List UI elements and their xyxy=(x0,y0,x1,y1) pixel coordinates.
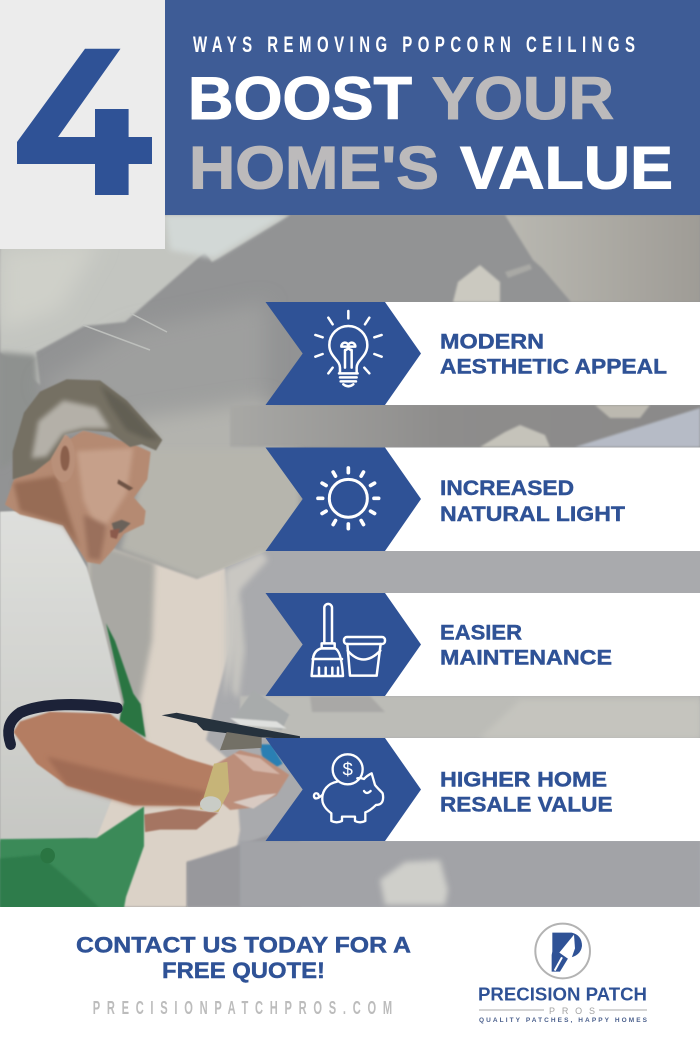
ear xyxy=(55,434,74,481)
label: HIGHER HOME xyxy=(440,769,607,792)
background photo: plasterer working on ceiling xyxy=(0,215,700,908)
big numeral 4 xyxy=(17,49,152,195)
label: INCREASED xyxy=(440,477,574,500)
call to action xyxy=(76,933,411,983)
icon: light bulb xyxy=(315,311,382,386)
title line one: YOUR xyxy=(432,65,614,132)
title line two: VALUE xyxy=(460,134,673,202)
label: EASIER xyxy=(440,621,522,644)
hair xyxy=(13,379,162,479)
title line two: HOME'S xyxy=(189,134,439,202)
label: MAINTENANCE xyxy=(440,646,612,670)
label: MODERN xyxy=(440,330,544,353)
website: PRECISIONPATCHPROS.COM xyxy=(93,998,392,1019)
label xyxy=(440,477,625,526)
blue trowel handle xyxy=(260,744,283,769)
logo tagline: QUALITY PATCHES, HAPPY HOMES xyxy=(479,1017,648,1024)
sleeve band xyxy=(8,705,117,744)
logo name: PRECISION PATCH xyxy=(478,984,647,1005)
panel: number 4 xyxy=(0,0,165,249)
icon: piggy bank with coin xyxy=(314,754,383,822)
icon: piggy bank with coin: $ xyxy=(342,759,353,780)
label xyxy=(440,769,612,817)
lower hand xyxy=(144,809,218,832)
spatula and plaster xyxy=(230,696,289,730)
panel: easier maintenance xyxy=(266,593,700,696)
moustache and eye xyxy=(110,479,133,539)
wrist watch xyxy=(200,762,229,812)
upper hand xyxy=(213,750,289,810)
neck and face xyxy=(5,430,151,564)
title line one: BOOST xyxy=(188,65,412,132)
plasterer figure xyxy=(0,379,300,908)
label xyxy=(440,330,667,378)
subtitle: WAYS REMOVING POPCORN CEILINGS xyxy=(193,32,635,57)
title line one xyxy=(188,65,614,132)
wall below ceiling line xyxy=(187,551,700,907)
icon: broom and bucket xyxy=(312,604,385,676)
logo xyxy=(478,924,648,1024)
label xyxy=(440,621,612,670)
green overalls xyxy=(0,806,144,908)
panel: higher home resale value xyxy=(266,738,700,841)
logo sub-name: PROS xyxy=(549,1006,595,1016)
icon: sun xyxy=(318,468,379,529)
call to action: FREE QUOTE! xyxy=(162,958,325,983)
label: RESALE VALUE xyxy=(440,794,612,817)
ceiling and wall surfaces xyxy=(0,215,700,907)
green overall strap xyxy=(106,623,146,737)
t-shirt xyxy=(0,511,122,842)
panel: increased natural light xyxy=(266,448,700,551)
label: AESTHETIC APPEAL xyxy=(440,355,667,378)
forearm xyxy=(13,712,217,806)
title line two xyxy=(189,134,673,202)
label: NATURAL LIGHT xyxy=(440,503,625,526)
panel: title header xyxy=(165,0,700,215)
logo mark xyxy=(535,924,590,978)
panel: footer xyxy=(0,907,700,1037)
trowel xyxy=(162,713,300,750)
panel: modern aesthetic appeal xyxy=(266,302,700,405)
call to action: CONTACT US TODAY FOR A xyxy=(76,933,411,958)
